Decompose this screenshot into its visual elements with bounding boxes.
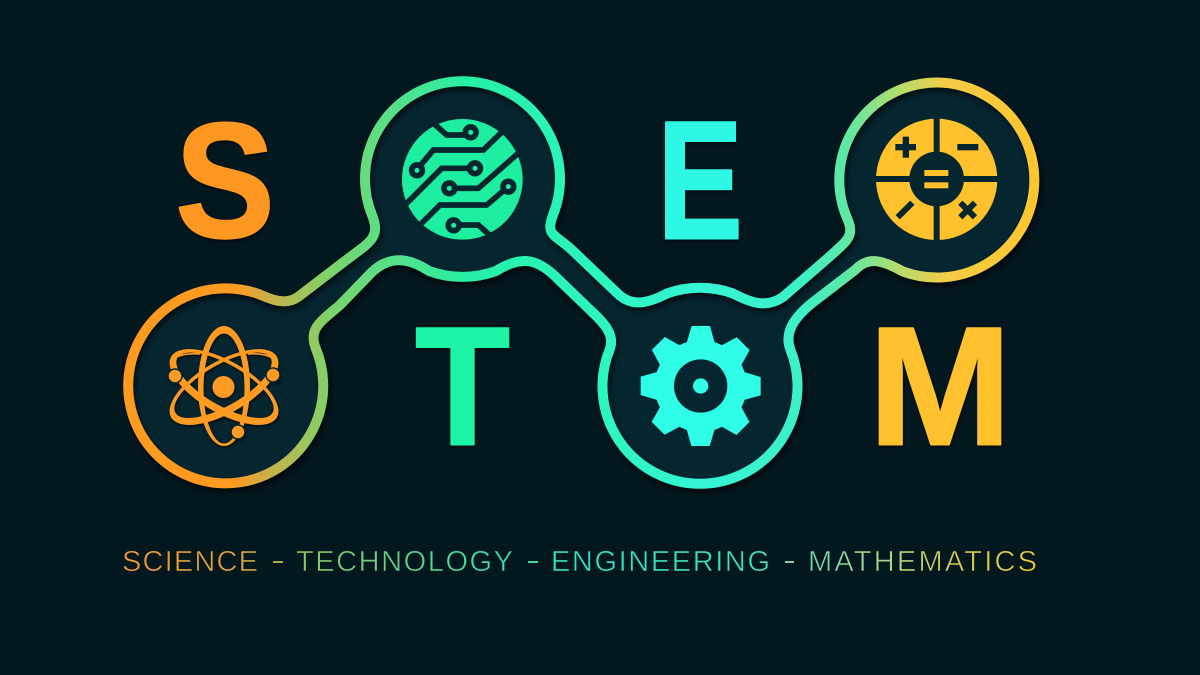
- tagline: SCIENCE: [122, 546, 258, 578]
- connected circle track: [128, 81, 1036, 488]
- icon: math symbols: [874, 117, 999, 242]
- letter E: E: [657, 85, 743, 275]
- letter T: T: [415, 293, 510, 481]
- icon: atom: [158, 326, 290, 446]
- tagline: TECHNOLOGY: [296, 546, 513, 578]
- icon: circuit chip: [402, 119, 523, 240]
- icon: gear: [641, 326, 761, 446]
- letter M: M: [868, 292, 1012, 481]
- tagline: [122, 546, 1037, 578]
- letter S: S: [175, 90, 275, 273]
- tagline: MATHEMATICS: [808, 546, 1037, 578]
- tagline: ENGINEERING: [551, 546, 770, 578]
